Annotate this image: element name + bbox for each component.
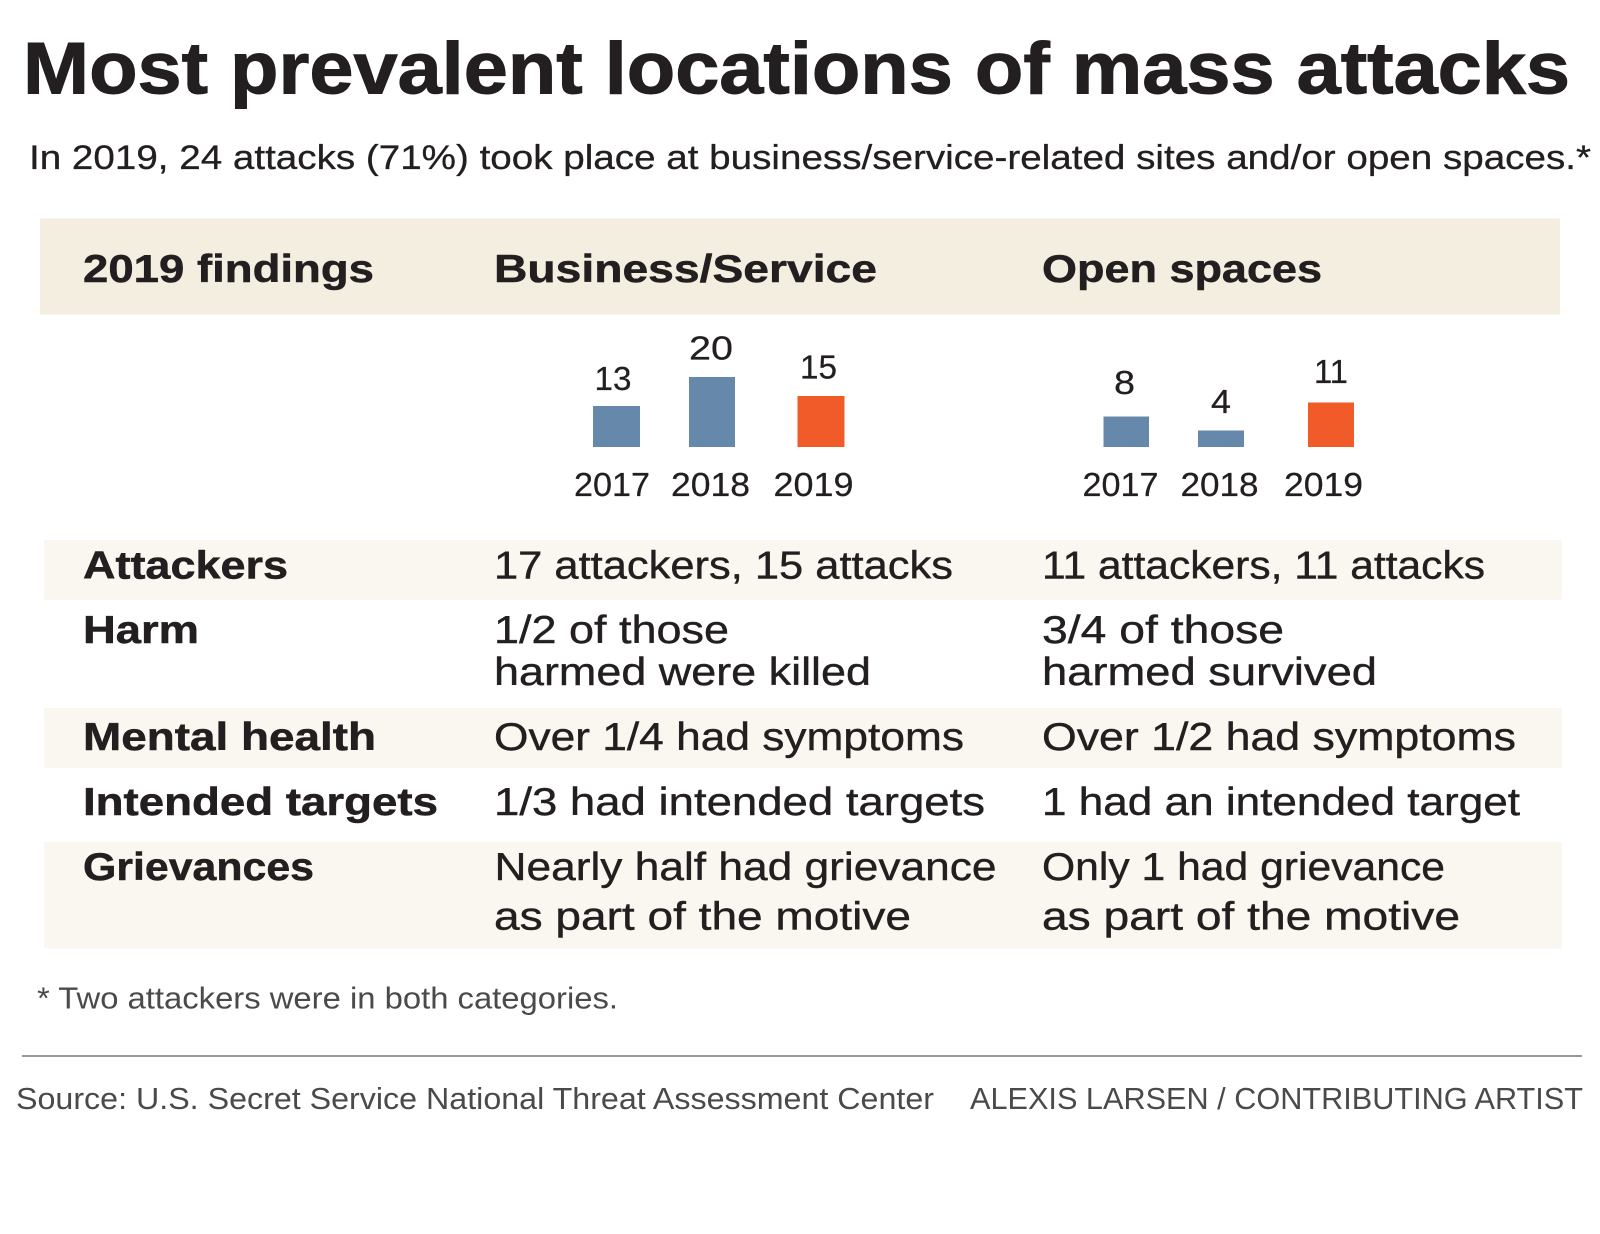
header: Business/Service: Business/Service [494,248,877,291]
table header band [40,218,1560,314]
row: Mental health: Mental health [83,716,376,759]
footnote: * Two attackers were in both categories. [37,980,618,1016]
bar chart: Open spaces: 2017 [1082,466,1158,503]
row: Grievances: Only 1 had grievance [1042,846,1445,889]
row: Harm [83,609,1377,694]
header: Open spaces: Open spaces [1042,248,1322,291]
bar chart: Open spaces: 8 [1114,364,1135,401]
bar chart: Open spaces: 2019 [1284,466,1363,503]
row: Intended targets: 1 had an intended target [1042,781,1520,824]
title: Most prevalent locations of mass attacks [23,28,1570,110]
row: Attackers: 11 attackers, 11 attacks [1042,544,1485,588]
bar chart: Business/Service [574,330,854,503]
bar chart: Business/Service: 20 [689,330,733,366]
artist credit: ALEXIS LARSEN / CONTRIBUTING ARTIST [970,1081,1583,1116]
bar chart: Open spaces: 4 [1211,383,1231,420]
row: Harm: harmed were killed [494,651,871,694]
bar chart: Business/Service: 2018 [671,466,750,503]
bar chart: Business/Service: 2019 [774,466,854,503]
row: Harm: harmed survived [1042,651,1377,694]
subtitle: In 2019, 24 attacks (71%) took place at business/service-related sites and/or open spaces.* [29,139,1591,177]
row: Grievances: as part of the motive [494,896,911,938]
row: Grievances [44,842,1562,948]
row: Grievances: Nearly half had grievance [494,846,996,889]
bar chart: Open spaces: 2018 [1180,466,1258,503]
row: Attackers: 17 attackers, 15 attacks [494,544,953,588]
row: Attackers [44,540,1562,600]
row: Grievances: as part of the motive [1042,896,1460,938]
header: 2019 findings: 2019 findings [83,248,374,291]
row: Mental health [44,708,1562,768]
row: Intended targets: 1/3 had intended targets [494,781,985,824]
bar chart: Open spaces [1082,353,1363,503]
row: Intended targets: Intended targets [83,781,438,824]
row: Harm: 1/2 of those [494,609,729,652]
row: Intended targets [83,781,1520,824]
row: Harm: 3/4 of those [1042,609,1284,652]
row: Mental health: Over 1/2 had symptoms [1042,716,1516,759]
bar chart: Business/Service: 2017 [574,466,650,503]
row: Attackers: Attackers [83,544,288,588]
row: Harm: Harm [83,609,199,652]
bar chart: Business/Service: 13 [594,360,632,397]
bar chart: Open spaces: 11 [1314,353,1348,390]
source credit: Source: U.S. Secret Service National Threat Assessment Center [16,1081,934,1116]
row: Mental health: Over 1/4 had symptoms [494,716,964,759]
bar chart: Business/Service: 15 [800,348,837,386]
row: Grievances: Grievances [83,846,314,889]
